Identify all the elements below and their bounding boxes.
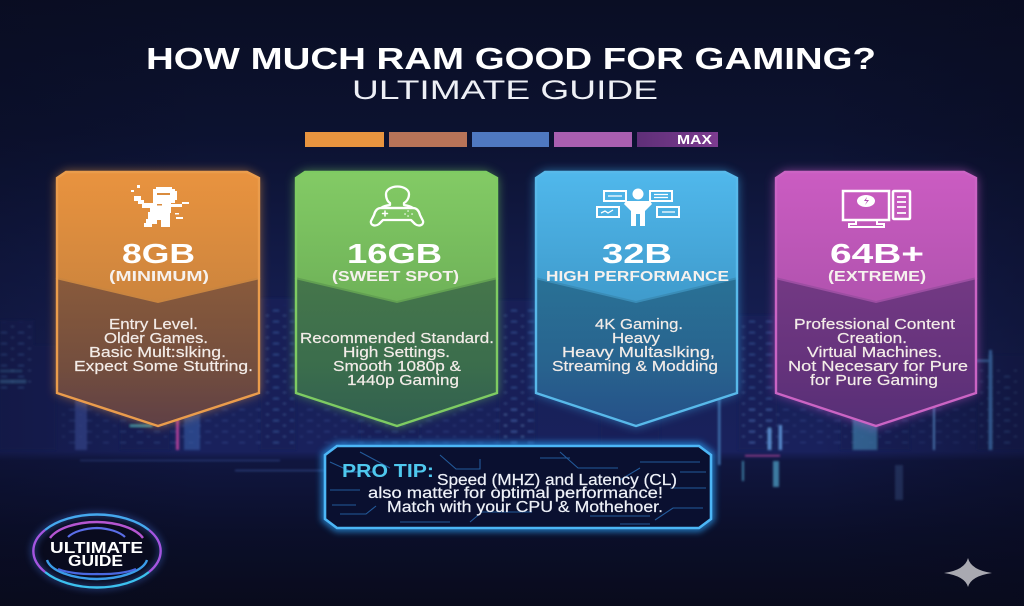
icon: desktop computer: [843, 191, 910, 227]
label: sweet spot: (SWEET SPOT): [332, 268, 459, 285]
text: 8GB description: [74, 316, 253, 375]
label: extreme: (EXTREME): [828, 268, 926, 285]
text: 32B description: Heavy: [612, 330, 661, 347]
panel: 16GB sweet spot: [295, 171, 498, 427]
text: 8GB description: Entry Level.: [109, 316, 198, 333]
text: 64B+ description: Not Necesary for Pure: [788, 358, 968, 375]
heading: 64B+: 64B+: [830, 238, 924, 269]
text: 16GB description: Recommended Standard.: [300, 330, 494, 347]
text: tip body: Match with your CPU & Mothehoer.: [387, 499, 663, 516]
text: 64B+ description: Virtual Machines.: [807, 344, 942, 361]
text: tip body: also matter for optimal performance!: [368, 485, 663, 502]
text: 64B+ description: [788, 316, 968, 389]
background: city skyline: [0, 298, 1024, 500]
text: 64B+ description: for Pure Gaming: [810, 372, 938, 389]
icon: person with screens: [597, 188, 679, 226]
text: 32B description: Heavy Multaslking,: [562, 344, 715, 361]
icon: pixel character: [131, 185, 189, 227]
heading: pro tip: PRO TIP:: [342, 461, 434, 481]
callout: pro tip: [325, 446, 711, 528]
text: 16GB description: High Settings.: [343, 344, 450, 361]
text: 16GB description: 1440p Gaming: [347, 372, 459, 389]
text: tip body: Speed (MHZ) and Latency (CL): [437, 472, 677, 489]
text: 64B+ description: Professional Content: [794, 316, 956, 333]
text: 8GB description: Older Games.: [104, 330, 208, 347]
heading: 16GB: 16GB: [347, 238, 442, 269]
text: 32B description: Streaming & Modding: [552, 358, 718, 375]
icon: sparkle watermark: [944, 558, 992, 587]
subtitle: ULTIMATE GUIDE: [352, 75, 658, 105]
panel: 8GB minimum: [56, 171, 260, 427]
icon: gamer with controller: [371, 187, 423, 225]
panel: 32B high performance: [535, 171, 738, 427]
text: 8GB description: Expect Some Stuttring.: [74, 358, 253, 375]
heading: 32B: 32B: [602, 238, 672, 269]
label: minimum: (MINIMUM): [109, 268, 209, 285]
text: tip body: [368, 472, 677, 516]
text: 8GB description: Basic Mult:slking.: [89, 344, 226, 361]
text: 32B description: 4K Gaming.: [595, 316, 683, 333]
heading: 8GB: 8GB: [122, 238, 195, 269]
text: 16GB description: [300, 330, 494, 389]
text: 32B description: [552, 316, 718, 375]
text: 16GB description: Smooth 1080p &: [333, 358, 461, 375]
badge: ultimate guide: GUIDE: [68, 553, 123, 570]
title: HOW MUCH RAM GOOD FOR GAMING?: [146, 41, 876, 76]
label: high performance: HIGH PERFORMANCE: [546, 268, 729, 285]
panel: 64B+ extreme: [775, 171, 977, 427]
badge: ultimate guide: ULTIMATE: [50, 540, 143, 557]
text: 64B+ description: Creation.: [837, 330, 907, 347]
legend bar: MAX: [677, 133, 713, 147]
badge: ultimate guide: [33, 514, 161, 588]
legend bar: [305, 132, 718, 147]
